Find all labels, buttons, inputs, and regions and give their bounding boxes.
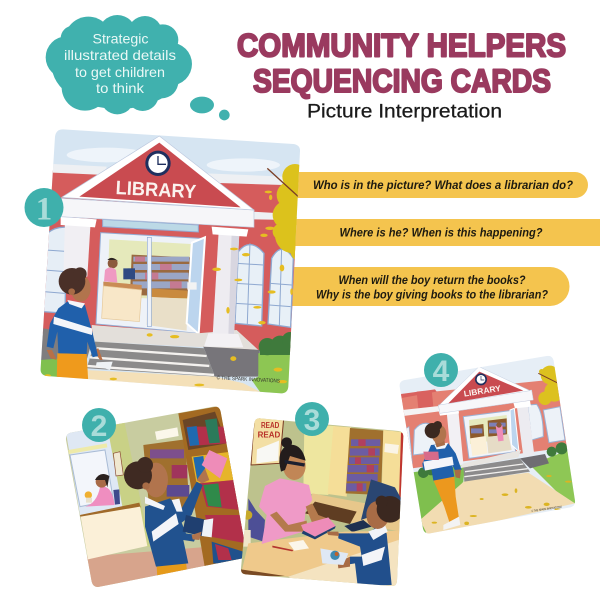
library sign: LIBRARY (115, 178, 197, 203)
back counter (307, 493, 402, 532)
transom (103, 219, 198, 232)
title: COMMUNITY HELPERS (237, 28, 566, 64)
poster: READ (258, 430, 280, 440)
boy (47, 267, 113, 383)
chair and plant (248, 498, 265, 542)
building (401, 378, 572, 468)
card 2: boy choosing books from shelves (66, 406, 244, 587)
card 4: boy leaving with books (395, 350, 582, 543)
librarian (108, 258, 118, 268)
sign (155, 427, 179, 440)
cloud text: to think (96, 80, 145, 96)
question ribbon 2 (290, 219, 600, 246)
boy (422, 421, 462, 530)
badge 2 (82, 408, 116, 443)
arched windows (43, 227, 67, 313)
back shelf (143, 440, 188, 508)
badge 1: 1 (36, 192, 52, 228)
clock (145, 151, 171, 176)
title: SEQUENCING CARDS (253, 63, 551, 99)
thought cloud (46, 15, 230, 120)
boy (327, 496, 403, 586)
falling leaves (44, 191, 293, 386)
book being exchanged (301, 517, 336, 537)
question ribbon 3 (285, 267, 570, 306)
window (66, 430, 122, 515)
platform and steps (92, 325, 258, 350)
entablature (438, 390, 533, 413)
badge 4 (424, 353, 458, 388)
boy (156, 564, 187, 576)
desk (80, 503, 141, 517)
bush (258, 332, 291, 356)
building wall (40, 170, 297, 353)
bookshelf (346, 428, 383, 495)
pediment (439, 367, 530, 405)
badge 3: 3 (304, 404, 320, 437)
columns (447, 410, 463, 465)
desk (241, 531, 402, 577)
badge 3 (295, 402, 329, 437)
poster: READ (261, 421, 280, 430)
badge 2: 2 (91, 410, 107, 443)
front shelving (178, 406, 250, 568)
card 1: boy arriving at the library (40, 129, 300, 394)
question ribbon 2: Where is he? When is this happening? (340, 228, 542, 240)
windows (413, 423, 440, 455)
left column (63, 220, 91, 277)
question ribbon 3: Why is the boy giving books to the librarian? (316, 290, 548, 302)
cloud text: illustrated details (64, 47, 176, 63)
poster (251, 417, 284, 465)
librarian (85, 474, 120, 507)
question ribbon 1 (290, 172, 588, 198)
cloud text: to get children (75, 64, 165, 80)
entablature (60, 198, 254, 227)
leaves (432, 475, 572, 525)
tree (272, 164, 300, 260)
title (237, 28, 566, 99)
clock (475, 373, 487, 385)
cloud text: Strategic (92, 30, 148, 46)
wall strip (107, 420, 150, 547)
library sign: LIBRARY (463, 383, 502, 399)
pink book (202, 450, 227, 478)
copyright: © THE SPARK INNOVATIONS (531, 505, 562, 513)
floor (87, 547, 211, 587)
ground (402, 465, 465, 543)
monitor (361, 479, 404, 520)
tree (538, 366, 564, 405)
librarian (259, 437, 330, 544)
badge 4: 4 (433, 355, 450, 388)
badge 1 (24, 188, 64, 228)
bushes (418, 442, 568, 478)
door opening (96, 233, 205, 333)
globe book (320, 548, 348, 565)
cloud text (64, 30, 176, 96)
copyright: © THE SPARK INNOVATIONS (217, 374, 281, 385)
card 3: librarian handing over the book (240, 418, 404, 586)
open door leaf (187, 237, 205, 334)
steps (463, 458, 530, 482)
door (463, 411, 516, 458)
question ribbon 3: When will the boy return the books? (338, 275, 526, 287)
right column (213, 232, 239, 337)
subtitle: Picture Interpretation (307, 102, 502, 122)
pediment (62, 136, 254, 210)
question ribbon 1: Who is in the picture? What does a librarian do? (313, 180, 573, 192)
ground (40, 358, 61, 378)
books in hand (183, 515, 207, 537)
